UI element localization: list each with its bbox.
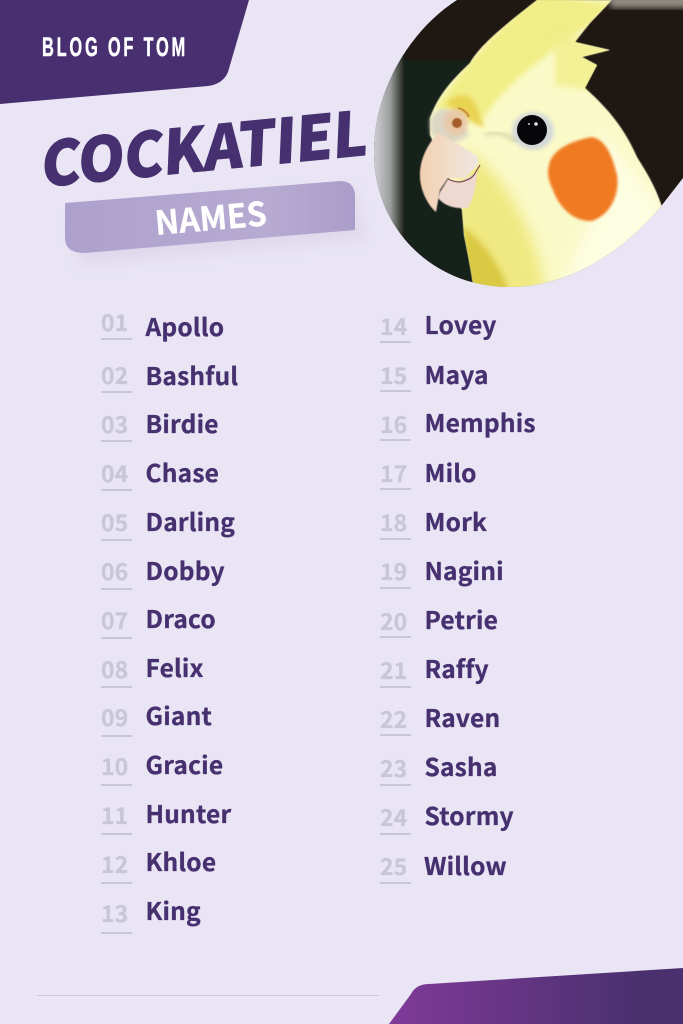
name 01: 01 bbox=[101, 304, 128, 338]
name 08: 08 bbox=[101, 651, 128, 685]
beak upper bbox=[420, 133, 478, 212]
footer rule bbox=[37, 995, 379, 996]
name 21 bbox=[380, 651, 489, 688]
name 05 bbox=[101, 504, 235, 541]
name 18: 18 bbox=[380, 504, 407, 538]
name 13: 13 bbox=[101, 895, 128, 929]
name 17: 17 bbox=[380, 455, 407, 489]
name 22 bbox=[380, 700, 500, 736]
bird photo bbox=[370, 0, 683, 295]
name 16: 16 bbox=[380, 406, 407, 440]
name list column 2 bbox=[380, 307, 536, 884]
name 14 bbox=[380, 307, 497, 343]
name 25: Willow bbox=[424, 848, 507, 883]
photo background bbox=[370, 0, 683, 295]
name 05: Darling bbox=[146, 504, 235, 539]
bird head bbox=[430, 0, 662, 290]
name 24: Stormy bbox=[424, 798, 514, 833]
name 02: Bashful bbox=[146, 358, 238, 393]
brow mark bbox=[458, 108, 469, 117]
name 11 bbox=[101, 796, 232, 835]
name 01 bbox=[101, 304, 224, 344]
beak lower bbox=[438, 172, 477, 208]
name 13 bbox=[101, 893, 201, 934]
name 07 bbox=[101, 601, 216, 639]
name 20: Petrie bbox=[424, 602, 498, 636]
name 02 bbox=[101, 357, 238, 393]
yellow brow bbox=[446, 95, 484, 128]
name 05: 05 bbox=[101, 504, 128, 538]
name 21: Raffy bbox=[424, 651, 489, 686]
name 22: 22 bbox=[380, 701, 407, 735]
eye streak bbox=[485, 133, 516, 142]
footer banner bbox=[389, 968, 683, 1024]
neck highlight bbox=[560, 136, 662, 278]
name 04 bbox=[101, 455, 219, 491]
crest shading bbox=[435, 0, 618, 125]
name 20 bbox=[380, 602, 498, 638]
name 25: 25 bbox=[380, 848, 407, 882]
name 06: Dobby bbox=[146, 553, 225, 588]
name 11: Hunter bbox=[146, 796, 231, 831]
name list column 1 bbox=[101, 304, 238, 934]
name 03: 03 bbox=[101, 406, 128, 440]
name 23: 23 bbox=[380, 750, 407, 784]
name 03: Birdie bbox=[146, 406, 219, 441]
name 07: 07 bbox=[101, 602, 128, 636]
cheek patch bbox=[548, 137, 618, 221]
name 08 bbox=[101, 650, 204, 688]
name 15: Maya bbox=[424, 357, 489, 392]
name 16 bbox=[380, 405, 536, 441]
name 10: 10 bbox=[101, 748, 128, 782]
name 02: 02 bbox=[101, 357, 128, 391]
title: COCKATIEL bbox=[40, 84, 370, 205]
name 04: 04 bbox=[101, 455, 128, 489]
cere feathers bbox=[430, 109, 470, 146]
names tag shadow bbox=[70, 188, 366, 264]
eye ring bbox=[512, 112, 554, 150]
name 03 bbox=[101, 406, 219, 442]
name 15 bbox=[380, 357, 489, 392]
logo text: BLOG OF TOM bbox=[42, 32, 185, 62]
name 15: 15 bbox=[380, 357, 407, 391]
name 16: Memphis bbox=[424, 405, 536, 440]
name 09 bbox=[101, 698, 212, 737]
cere bbox=[444, 109, 468, 135]
name 07: Draco bbox=[146, 601, 216, 636]
header banner bbox=[0, 0, 249, 104]
mouth line bbox=[448, 165, 480, 182]
name 06 bbox=[101, 553, 225, 590]
name 20: 20 bbox=[380, 603, 407, 637]
name 19 bbox=[380, 553, 504, 589]
name 12: Khloe bbox=[146, 844, 216, 879]
name 22: Raven bbox=[424, 700, 500, 735]
throat shading bbox=[455, 150, 545, 295]
eye bbox=[517, 115, 547, 145]
name 19: Nagini bbox=[424, 553, 504, 588]
name 08: Felix bbox=[146, 650, 204, 685]
name 09: 09 bbox=[101, 699, 128, 733]
name 18 bbox=[380, 504, 487, 540]
name 23 bbox=[380, 749, 498, 786]
name 24: 24 bbox=[380, 799, 407, 833]
name 12: 12 bbox=[101, 846, 128, 880]
name 11: 11 bbox=[101, 797, 128, 831]
nostril bbox=[452, 118, 462, 128]
subtitle: NAMES bbox=[153, 187, 268, 245]
name 10 bbox=[101, 747, 223, 786]
name 13: King bbox=[146, 893, 201, 928]
name 17 bbox=[380, 454, 477, 490]
name 24 bbox=[380, 798, 514, 835]
name 06: 06 bbox=[101, 553, 128, 587]
name 14: 14 bbox=[380, 308, 407, 342]
name 09: Giant bbox=[146, 698, 212, 733]
name 10: Gracie bbox=[146, 747, 223, 782]
name 19: 19 bbox=[380, 553, 407, 587]
names tag bbox=[65, 181, 355, 253]
name 18: Mork bbox=[424, 504, 487, 538]
name 23: Sasha bbox=[424, 749, 498, 784]
name 01: Apollo bbox=[146, 309, 224, 344]
name 04: Chase bbox=[146, 455, 219, 490]
name 25 bbox=[380, 848, 507, 884]
name 21: 21 bbox=[380, 652, 407, 686]
name 14: Lovey bbox=[424, 307, 497, 342]
name 12 bbox=[101, 844, 216, 884]
name 17: Milo bbox=[424, 454, 477, 490]
